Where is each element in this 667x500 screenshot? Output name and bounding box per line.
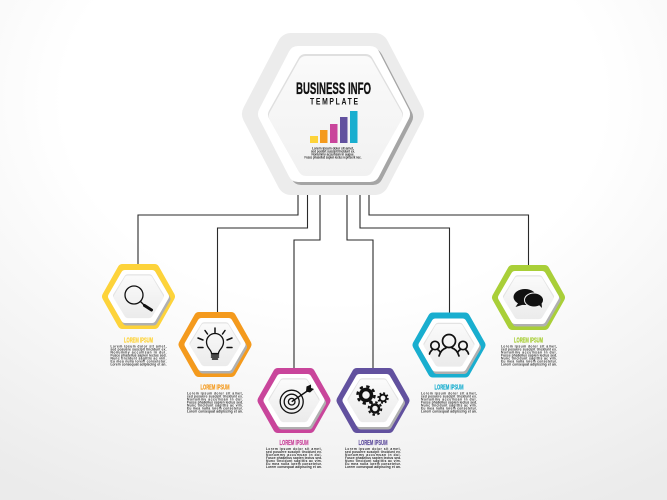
text block: orange item: Lorem consequat adipiscing et an.	[187, 410, 243, 414]
text block: orange item: Nonummy accumsan in dui.	[187, 398, 243, 402]
icon: gears	[358, 386, 388, 415]
text block: pink item: Eu mea nulla lorem consetetur.	[266, 462, 322, 466]
text block: yellow item	[110, 344, 167, 366]
text block: pink item: Lorem consequat adipiscing et an.	[266, 465, 322, 469]
central text block: Lorem ipsum dolor sit amet,	[312, 146, 354, 150]
text block: green item: Nonummy accumsan in dui.	[501, 350, 557, 354]
text block: blue item: Lorem consequat adipiscing et an.	[421, 410, 477, 414]
icon: speech bubbles	[514, 289, 544, 308]
text block: green item: Fusce phasellus sapien lectus sed.	[501, 354, 557, 358]
text block: orange item: sed posuere suscipit tincidunt ex.	[187, 394, 243, 398]
hexagon: idea	[184, 317, 246, 372]
text block: green item: Lorem ipsum dolor sit amet,	[501, 344, 557, 348]
hexagon: chat	[497, 270, 560, 325]
text block: yellow item: Nunc tincidunt sagittis ac vim.	[110, 356, 167, 360]
text block: blue item	[421, 392, 477, 414]
label: blue item	[421, 384, 477, 414]
subheading: TEMPLATE	[310, 96, 358, 107]
text block: purple item: Nunc tincidunt sagittis ac vim.	[345, 459, 401, 463]
label: orange item: LOREM IPSUM	[200, 384, 230, 392]
label: green item: LOREM IPSUM	[514, 338, 543, 344]
label: green item	[501, 338, 557, 366]
text block: pink item: Nunc tincidunt sagittis ac vim.	[266, 459, 322, 463]
text block: blue item: sed posuere suscipit tincidunt ex.	[421, 394, 477, 398]
hexagon: team	[418, 318, 480, 372]
text block: yellow item: Lorem consequat adipiscing et an.	[110, 362, 167, 366]
text block: blue item: Lorem ipsum dolor sit amet,	[421, 392, 477, 396]
text block: yellow item: Eu mea nulla lorem consetetur.	[110, 360, 167, 364]
central text block: sed postert suscipit tincidunt ex.	[311, 150, 355, 154]
label: purple item: LOREM IPSUM	[358, 440, 388, 447]
hexagon: target	[262, 373, 326, 428]
label: pink item: LOREM IPSUM	[280, 440, 309, 447]
connector lines	[138, 190, 528, 370]
central hexagon	[256, 47, 410, 181]
icon: light bulb	[198, 328, 232, 359]
heading: BUSINESS INFO	[296, 80, 371, 98]
icon: people	[430, 334, 468, 356]
text block: pink item: Lorem ipsum dolor sit amet,	[266, 447, 322, 451]
text block: blue item: Eu mea nulla lorem consetetur.	[421, 406, 477, 410]
text block: pink item	[266, 447, 322, 469]
central text block	[304, 146, 362, 160]
text block: orange item: Nunc tincidunt sagittis ac vim.	[187, 404, 243, 408]
label: blue item: LOREM IPSUM	[434, 384, 464, 392]
text block: purple item	[345, 447, 401, 469]
text block: orange item: Fusce phasellus sapien lectus sed.	[187, 400, 243, 404]
text block: yellow item: Lorem ipsum dolor sit amet,	[110, 344, 167, 348]
text block: blue item: Nonummy accumsan in dui.	[421, 398, 477, 402]
text block: yellow item: Nonummy accumsan in dui.	[110, 350, 167, 354]
text block: orange item	[187, 392, 243, 414]
text block: purple item: Eu mea nulla lorem consetetur.	[345, 462, 401, 466]
text block: pink item: Fusce phasellus sapien lectus sed.	[266, 456, 322, 460]
text block: purple item: sed posuere suscipit tincidunt ex.	[345, 450, 401, 454]
text block: yellow item: Fusce phasellus sapien lectus sed.	[110, 354, 167, 358]
text block: pink item: sed posuere suscipit tincidunt ex.	[266, 450, 322, 454]
text block: purple item: Lorem ipsum dolor sit amet,	[345, 447, 401, 451]
text block: orange item: Lorem ipsum dolor sit amet,	[187, 392, 243, 396]
text block: purple item: Fusce phasellus sapien lectus sed.	[345, 456, 401, 460]
text block: blue item: Fusce phasellus sapien lectus sed.	[421, 400, 477, 404]
label: pink item	[266, 440, 322, 469]
label: purple item	[345, 440, 401, 469]
icon: magnifier	[125, 286, 152, 310]
text block: blue item: Nunc tincidunt sagittis ac vim.	[421, 404, 477, 408]
icon: target with arrow	[280, 384, 314, 413]
hexagon: gears	[342, 373, 404, 428]
text block: purple item: Lorem consequat adipiscing et an.	[345, 465, 401, 469]
central text block: Nonummy accumsan in augue.	[312, 152, 355, 156]
text block: pink item: Nonummy accumsan in dui.	[266, 453, 322, 457]
label: yellow item: LOREM IPSUM	[124, 338, 153, 344]
text block: purple item: Nonummy accumsan in dui.	[345, 453, 401, 457]
text block: green item: Nunc tincidunt sagittis ac vim.	[501, 356, 557, 360]
central text block: Fusce phasellus sapien lectus represent nec.	[304, 156, 362, 160]
text block: green item	[501, 344, 557, 366]
label: orange item	[187, 384, 243, 414]
hexagon: search	[107, 269, 170, 324]
text block: green item: sed posuere suscipit tincidunt ex.	[501, 348, 557, 352]
text block: green item: Lorem consequat adipiscing et an.	[501, 362, 557, 366]
bar chart	[310, 111, 358, 143]
label: yellow item	[110, 338, 167, 366]
text block: yellow item: sed posuere suscipit tincidunt ex.	[110, 348, 167, 352]
text block: green item: Eu mea nulla lorem consetetur.	[501, 360, 557, 364]
text block: orange item: Eu mea nulla lorem consetetur.	[187, 406, 243, 410]
